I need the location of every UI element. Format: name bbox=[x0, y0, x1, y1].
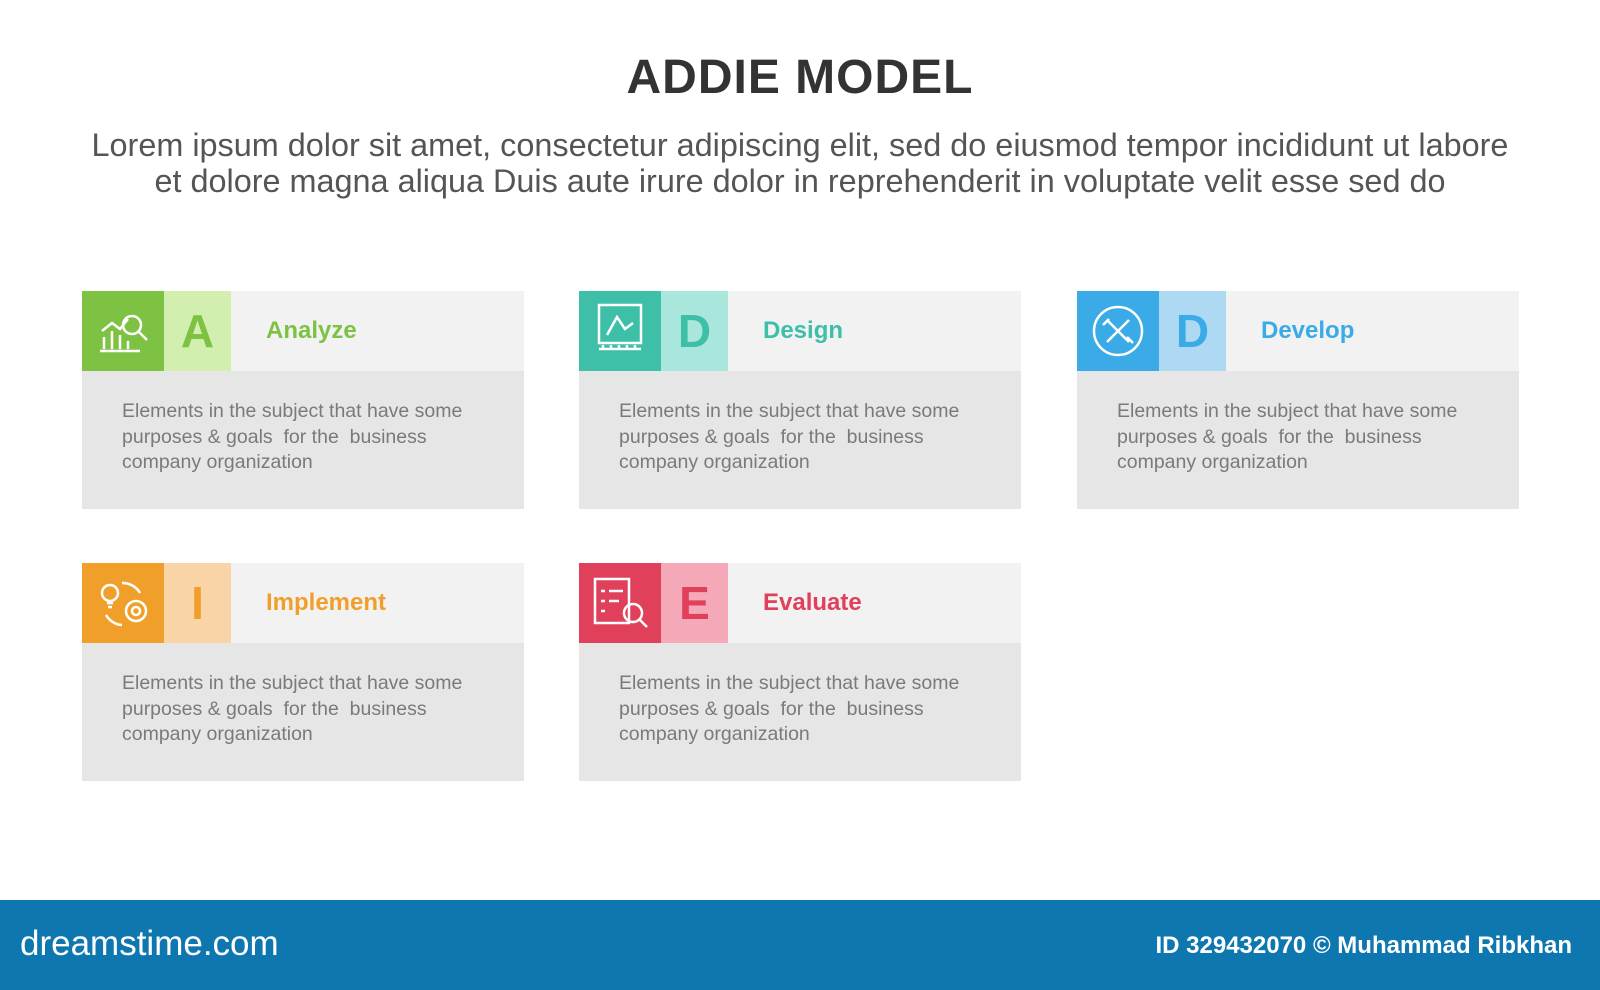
description: company organization bbox=[619, 723, 810, 745]
description: company organization bbox=[122, 723, 313, 745]
description: Elements in the subject that have some bbox=[122, 400, 462, 422]
icon: design blueprint bbox=[579, 291, 661, 371]
panel: analyze bbox=[82, 291, 524, 509]
heading: Evaluate: Evaluate bbox=[763, 589, 862, 616]
description: company organization bbox=[122, 451, 313, 473]
description bbox=[1117, 400, 1457, 473]
icon: analyze chart bbox=[82, 291, 164, 371]
description: purposes & goals for the business bbox=[122, 698, 427, 720]
subtitle: Lorem ipsum dolor sit amet, consectetur adipiscing elit, sed do eiusmod tempor incididunt ut labore bbox=[92, 127, 1508, 163]
footer credit: ID 329432070 © Muhammad Ribkhan bbox=[1155, 932, 1572, 959]
footer logo text: dreamstime.com bbox=[20, 924, 279, 963]
letter A bbox=[164, 291, 231, 371]
description bbox=[619, 400, 959, 473]
title: ADDIE MODEL bbox=[626, 51, 974, 104]
panel: implement bbox=[82, 563, 524, 781]
panel: evaluate bbox=[579, 563, 1021, 781]
letter A: A bbox=[181, 305, 214, 357]
icon: evaluate checklist bbox=[579, 563, 661, 643]
description: Elements in the subject that have some bbox=[619, 400, 959, 422]
heading: Implement: Implement bbox=[266, 589, 386, 616]
letter E: E bbox=[679, 577, 710, 629]
description: purposes & goals for the business bbox=[619, 698, 924, 720]
description: purposes & goals for the business bbox=[122, 426, 427, 448]
letter E bbox=[661, 563, 728, 643]
description: purposes & goals for the business bbox=[619, 426, 924, 448]
letter I bbox=[164, 563, 231, 643]
icon: implement gears bbox=[82, 563, 164, 643]
description: company organization bbox=[1117, 451, 1308, 473]
footer bar bbox=[0, 900, 1600, 990]
description bbox=[122, 672, 462, 745]
description bbox=[619, 672, 959, 745]
panel: develop bbox=[1077, 291, 1519, 509]
description: Elements in the subject that have some bbox=[1117, 400, 1457, 422]
letter I: I bbox=[191, 577, 204, 629]
description: Elements in the subject that have some bbox=[619, 672, 959, 694]
heading: Analyze: Analyze bbox=[266, 317, 357, 344]
description: Elements in the subject that have some bbox=[122, 672, 462, 694]
letter D: D bbox=[1176, 305, 1209, 357]
subtitle: et dolore magna aliqua Duis aute irure dolor in reprehenderit in voluptate velit esse sed do bbox=[154, 163, 1446, 199]
heading: Design: Design bbox=[763, 317, 843, 344]
icon: develop tools bbox=[1077, 291, 1159, 371]
heading: Develop: Develop bbox=[1261, 317, 1354, 344]
panel: design bbox=[579, 291, 1021, 509]
letter D bbox=[1159, 291, 1226, 371]
description: purposes & goals for the business bbox=[1117, 426, 1422, 448]
description: company organization bbox=[619, 451, 810, 473]
letter D: D bbox=[678, 305, 711, 357]
subtitle bbox=[92, 127, 1508, 199]
letter D bbox=[661, 291, 728, 371]
description bbox=[122, 400, 462, 473]
